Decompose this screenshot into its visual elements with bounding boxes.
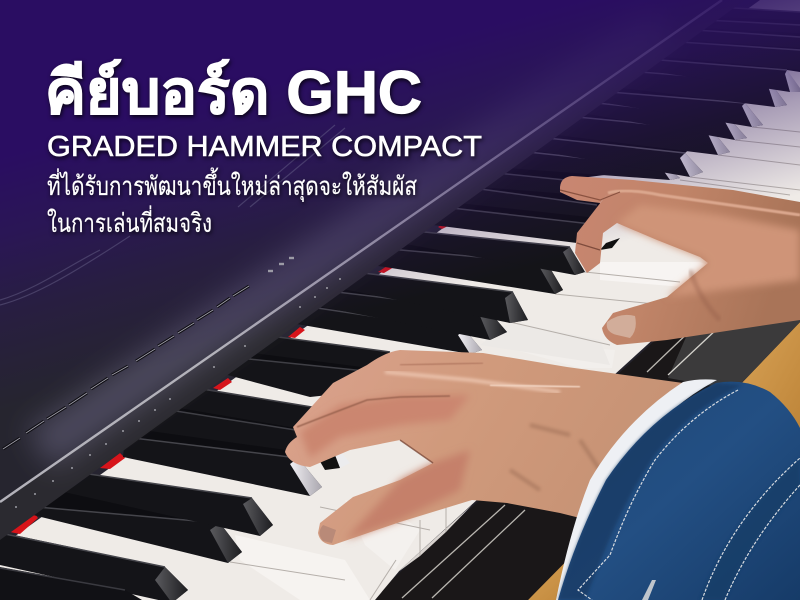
- key number marks on strip: [15, 278, 341, 508]
- title: คีย์บอร์ด GHC: [45, 59, 422, 126]
- description line 2: ในการเล่นที่สมจริง: [47, 205, 212, 238]
- left hand: [285, 350, 683, 545]
- panel sheen along the rail: [40, 20, 660, 450]
- subtitle: GRADED HAMMER COMPACT: [47, 131, 482, 163]
- description line 1: ที่ได้รับการพัฒนาขึ้นใหม่ล่าสุดจะให้สัมผัส: [47, 167, 417, 202]
- keyboard front rail: [370, 205, 800, 600]
- heading block: [45, 59, 482, 238]
- denim sleeve: [558, 382, 800, 600]
- panel reflection streaks: [0, 125, 345, 305]
- white shirt cuff: [556, 379, 717, 600]
- wooden floor: [528, 322, 800, 600]
- right hand: [560, 176, 800, 345]
- silver edge line: [0, 0, 722, 502]
- red felt strips: [10, 133, 571, 534]
- panel buttons: [3, 258, 294, 449]
